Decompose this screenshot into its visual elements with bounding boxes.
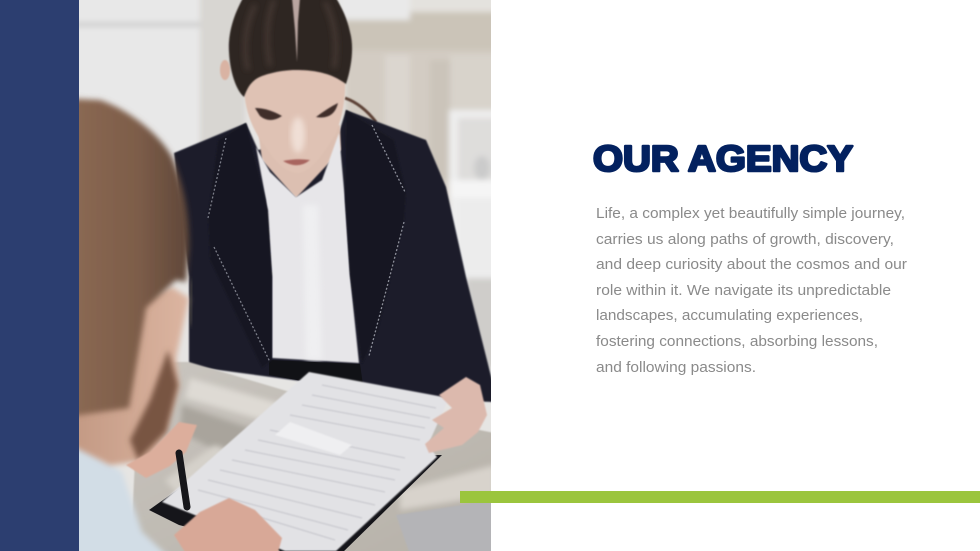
pen [179, 453, 187, 507]
hair [229, 0, 352, 97]
hair parting [292, 0, 300, 62]
beard [130, 350, 178, 460]
desk [130, 362, 510, 551]
shirt [256, 133, 359, 363]
woman [174, 0, 495, 402]
body paragraph: Life, a complex yet beautifully simple journey, [596, 205, 905, 222]
photo background: office [79, 0, 491, 506]
laptop [398, 503, 491, 551]
glasses [190, 280, 192, 325]
bottom hand [174, 498, 282, 551]
green accent bar [460, 491, 980, 503]
neck and ear [258, 125, 341, 198]
body paragraph: and deep curiosity about the cosmos and our [596, 256, 907, 273]
left hand [126, 422, 197, 478]
title: OUR AGENCY [593, 138, 853, 179]
clipboard [149, 455, 442, 551]
body paragraph: carries us along paths of growth, discovery, [596, 231, 894, 248]
body paragraph: and following passions. [596, 359, 756, 376]
shirt [79, 449, 166, 551]
body paragraph: role within it. We navigate its unpredictable [596, 282, 891, 299]
ponytail [345, 98, 376, 122]
neck and face [60, 287, 189, 465]
body paragraph: landscapes, accumulating experiences, [596, 307, 863, 324]
hair [79, 94, 192, 418]
form paper [162, 372, 449, 551]
body paragraph: fostering connections, absorbing lessons, [596, 333, 878, 350]
left navy band [0, 0, 79, 551]
lapels [208, 123, 272, 368]
eyes [255, 108, 282, 120]
jacket [174, 110, 495, 402]
body paragraph [596, 205, 907, 376]
dark waist [269, 360, 362, 382]
photo: interview across a desk [60, 0, 511, 551]
woman's right hand [425, 377, 487, 453]
man [60, 98, 282, 551]
mouth [283, 159, 310, 165]
hair sheen [245, 0, 336, 70]
face [244, 70, 346, 138]
